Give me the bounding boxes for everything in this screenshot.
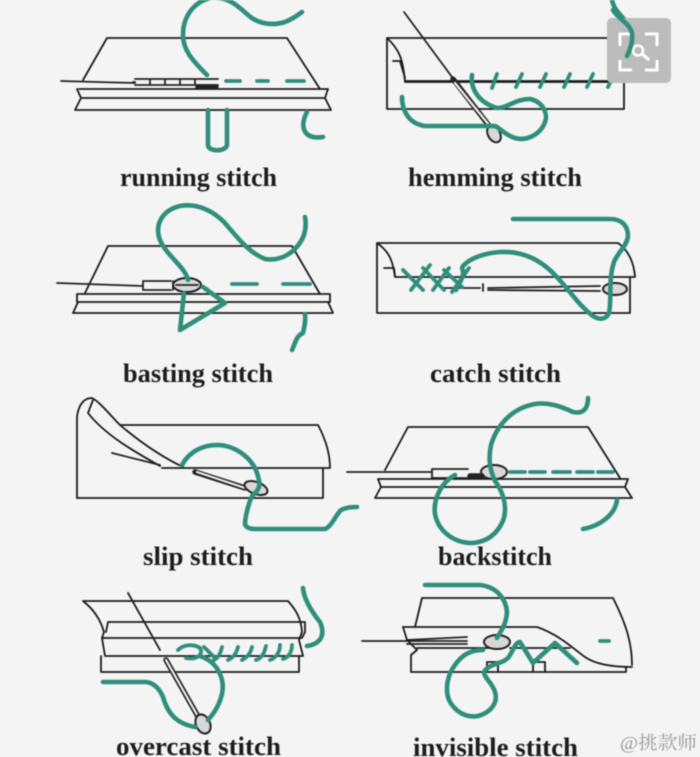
fabric layers (73, 246, 333, 313)
thread (403, 219, 628, 319)
panel: catch stitch (377, 219, 635, 319)
thread over button (613, 10, 632, 56)
needle (57, 278, 201, 292)
label: backstitch: backstitch (438, 542, 553, 571)
thread (183, 0, 323, 150)
needle (404, 12, 504, 145)
fabric layers (377, 243, 635, 313)
thread (103, 588, 322, 727)
thread (182, 445, 357, 529)
panel: backstitch (347, 398, 632, 543)
panel: basting stitch (57, 205, 333, 350)
needle (61, 79, 218, 87)
thread (158, 205, 310, 350)
label: basting stitch: basting stitch (123, 359, 274, 388)
fabric layers (387, 38, 632, 109)
fabric layers (75, 38, 331, 110)
needle (362, 635, 510, 649)
thread (435, 398, 617, 543)
label: catch stitch: catch stitch (430, 359, 562, 388)
thread (402, 0, 632, 139)
panel: running stitch (61, 0, 331, 150)
needle (128, 593, 214, 736)
fabric layers (77, 398, 330, 498)
needle (442, 283, 627, 295)
panel: invisible stitch (362, 585, 632, 716)
panel: overcast stitch (83, 588, 322, 736)
needle (112, 453, 269, 498)
panel: slip stitch (77, 398, 357, 529)
icon: image search button (607, 18, 671, 83)
label: running stitch: running stitch (120, 163, 278, 192)
fabric layers (403, 598, 632, 672)
label: hemming stitch: hemming stitch (408, 163, 583, 192)
needle (347, 465, 507, 479)
fabric layers (83, 601, 305, 672)
thread (425, 585, 609, 716)
fabric layers (375, 427, 632, 498)
label: slip stitch: slip stitch (143, 542, 254, 571)
watermark: @挑款师 (620, 733, 697, 753)
panel: hemming stitch (387, 0, 632, 145)
